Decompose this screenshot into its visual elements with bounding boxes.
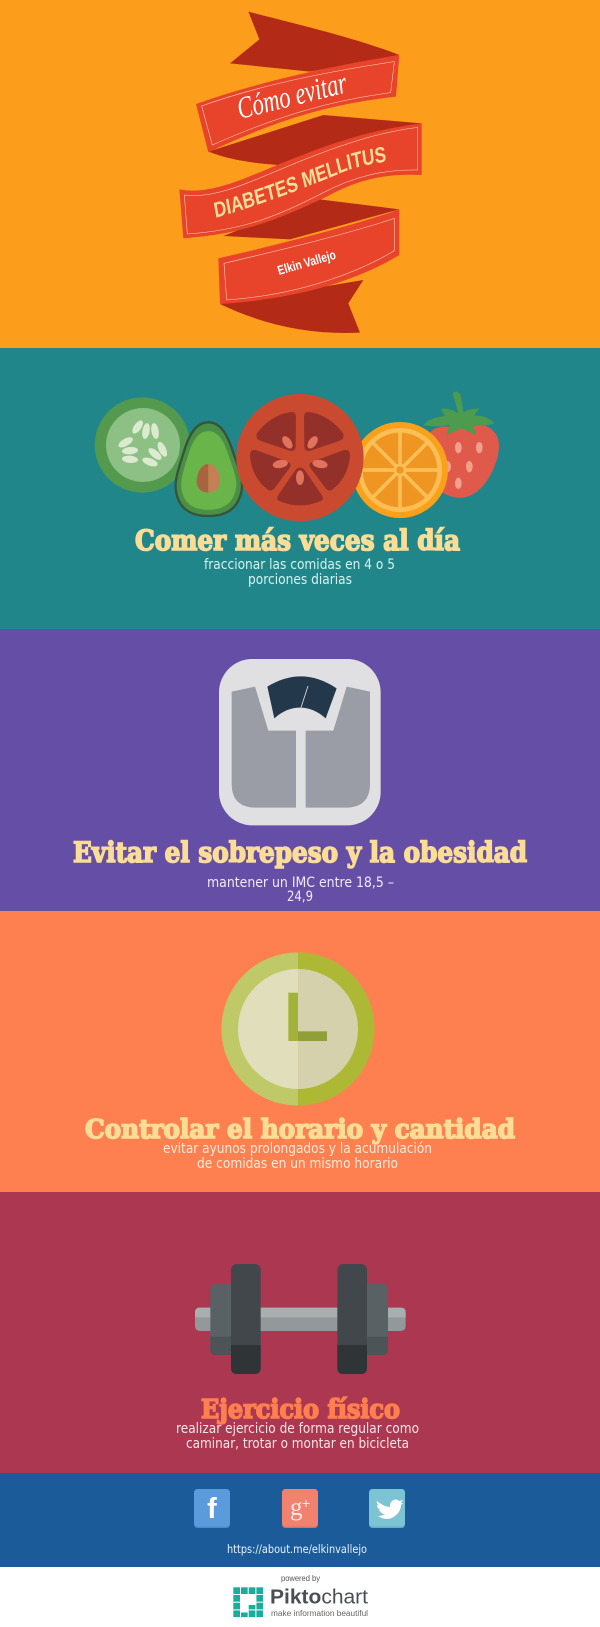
icon: twitter <box>369 1489 405 1528</box>
icon: fruit and vegetables <box>95 392 499 521</box>
text: evitar ayunos: evitar ayunos prolongados y la acumulación <box>163 1141 432 1157</box>
icon: piktochart logo <box>233 1587 263 1617</box>
icon: google plus: + <box>302 1495 310 1511</box>
panel: evitar el sobrepeso <box>0 629 600 911</box>
text: url: https://about.me/elkinvallejo <box>227 1542 367 1556</box>
ribbon title: Diabetes Mellitus: DIABETES MELLITUS <box>214 147 386 218</box>
text: mantener un IMC: 24,9 <box>287 889 313 905</box>
text: realizar ejercicio: realizar ejercicio de forma regular como <box>176 1421 419 1437</box>
icon: bathroom scale <box>219 659 381 825</box>
text: fraccionar las comidas: fraccionar las comidas en 4 o 5 <box>204 557 395 573</box>
text: piktochart wordmark: Piktochart <box>270 1586 368 1608</box>
orange slice <box>352 422 448 518</box>
panel: social footer <box>0 1473 600 1567</box>
text: realizar ejercicio: caminar, trotar o montar en bicicleta <box>186 1436 409 1452</box>
ribbon graphic <box>179 12 422 333</box>
icon: google plus: g <box>290 1494 303 1521</box>
heading: controlar el horario y cantidad: Controlar el horario y cantidad <box>85 1115 515 1145</box>
panel: ejercicio físico <box>0 1192 600 1473</box>
icon: google plus <box>282 1489 318 1528</box>
cucumber slice <box>95 397 190 493</box>
ribbon title: Cómo evitar: Cómo evitar <box>233 65 351 126</box>
heading: ejercicio físico: Ejercicio físico <box>201 1395 400 1425</box>
avocado <box>176 422 242 516</box>
text: evitar ayunos: de comidas en un mismo horario <box>197 1156 398 1172</box>
text: mantener un IMC <box>207 875 394 905</box>
ribbon author: Elkin Vallejo <box>276 247 338 278</box>
icon: facebook <box>194 1489 230 1528</box>
tomato slice <box>236 394 364 521</box>
heading: comer más veces al día: Comer más veces al día <box>135 524 460 557</box>
icon: clock <box>221 952 375 1106</box>
icon: dumbbell <box>195 1264 406 1374</box>
text: fraccionar las comidas: porciones diarias <box>248 572 352 588</box>
panel: piktochart credit <box>0 1567 600 1627</box>
text: realizar ejercicio <box>176 1421 419 1452</box>
panel: controlar el horario <box>0 911 600 1192</box>
strawberry <box>423 392 499 498</box>
panel: comer más veces <box>0 348 600 629</box>
text: make information beautiful: make information beautiful <box>271 1609 368 1618</box>
text: fraccionar las comidas <box>204 557 395 588</box>
text: evitar ayunos <box>163 1141 432 1172</box>
text: mantener un IMC: mantener un IMC entre 18,5 – <box>207 875 394 891</box>
heading: evitar el sobrepeso y la obesidad: Evitar el sobrepeso y la obesidad <box>73 836 527 869</box>
panel: title banner <box>0 0 600 348</box>
text: powered by: powered by <box>281 1574 320 1583</box>
icon: facebook: f <box>207 1493 217 1525</box>
